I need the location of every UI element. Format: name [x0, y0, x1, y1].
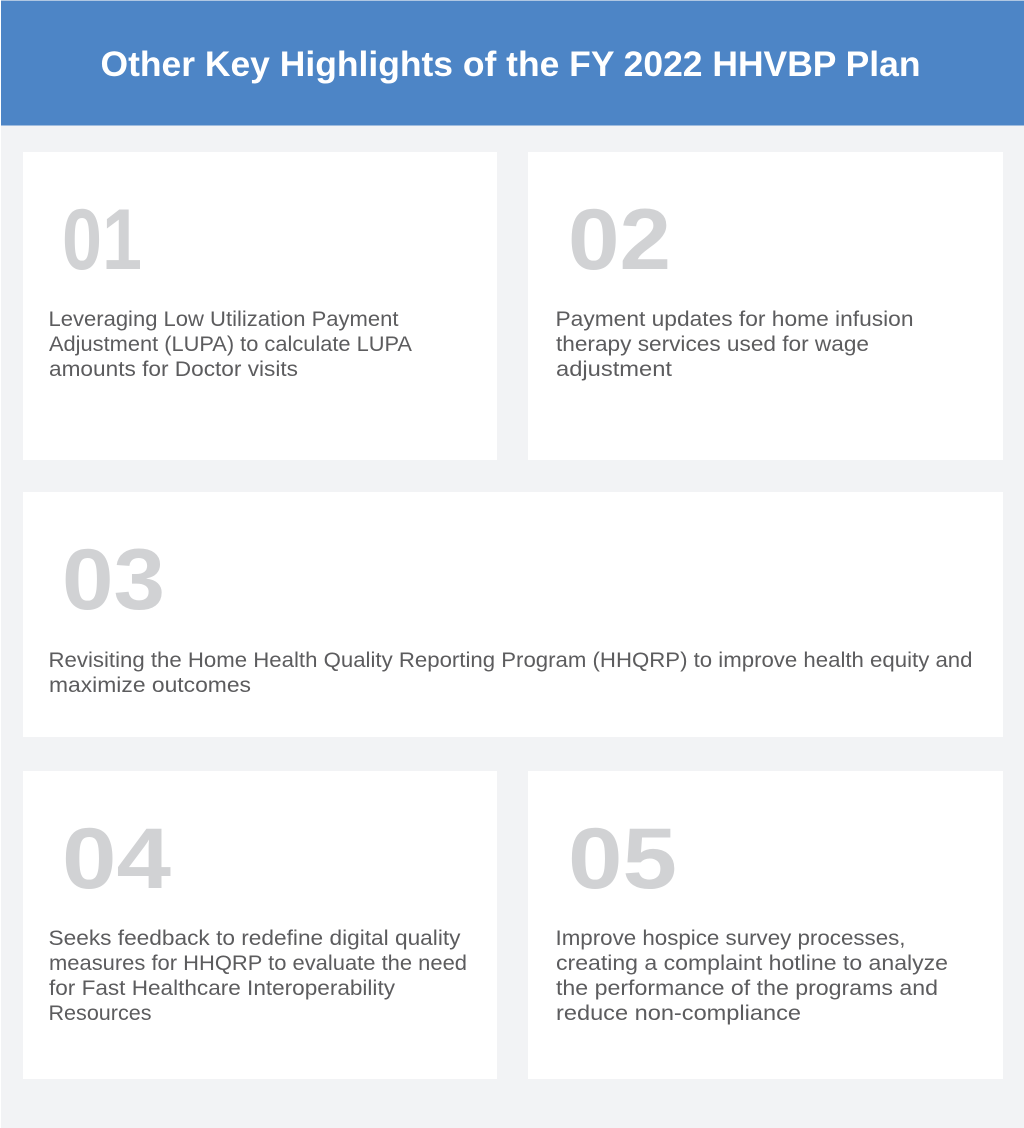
text block: card 01 — [48, 307, 413, 381]
text block: card 05: reduce non-compliance — [556, 1001, 801, 1025]
text block: card 04: measures for HHQRP to evaluate the need — [49, 951, 467, 975]
text block: card 02: Payment updates for home infusion — [556, 307, 914, 331]
header banner — [1, 1, 1024, 126]
text block: card 03 — [48, 648, 972, 697]
text block: card 01: Leveraging Low Utilization Payment — [48, 307, 399, 331]
number 02: 02 — [568, 192, 671, 288]
text block: card 02: adjustment — [556, 357, 672, 381]
number 04: 04 — [62, 811, 171, 907]
text block: card 04: for Fast Healthcare Interoperability — [49, 976, 395, 1000]
number 05: 05 — [568, 811, 677, 907]
text block: card 04: Seeks feedback to redefine digital quality — [48, 926, 461, 950]
text block: card 04 — [48, 926, 467, 1025]
text block: card 05: the performance of the programs and — [556, 976, 938, 1000]
text block: card 01: amounts for Doctor visits — [49, 357, 298, 381]
number 03: 03 — [62, 532, 165, 628]
panel: card 01 — [23, 152, 497, 460]
text block: card 01: Adjustment (LUPA) to calculate LUPA — [49, 332, 413, 356]
text block: card 05: Improve hospice survey processes, — [556, 926, 906, 950]
text block: card 05: creating a complaint hotline to analyze — [556, 951, 948, 975]
panel: card 02 — [528, 152, 1003, 460]
text block: card 02: therapy services used for wage — [556, 332, 869, 356]
text block: card 03: maximize outcomes — [49, 673, 251, 697]
panel: card 04 — [23, 771, 497, 1079]
text block: card 05 — [556, 926, 948, 1025]
text block: card 03: Revisiting the Home Health Quality Reporting Program (HHQRP) to improve health equity and — [48, 648, 972, 672]
text block: card 02 — [556, 307, 914, 381]
title: Other Key Highlights of the FY 2022 HHVBP Plan — [100, 45, 920, 84]
panel: card 05 — [528, 771, 1003, 1079]
number 01: 01 — [62, 192, 142, 288]
text block: card 04: Resources — [48, 1001, 152, 1025]
panel: card 03 — [23, 492, 1003, 737]
